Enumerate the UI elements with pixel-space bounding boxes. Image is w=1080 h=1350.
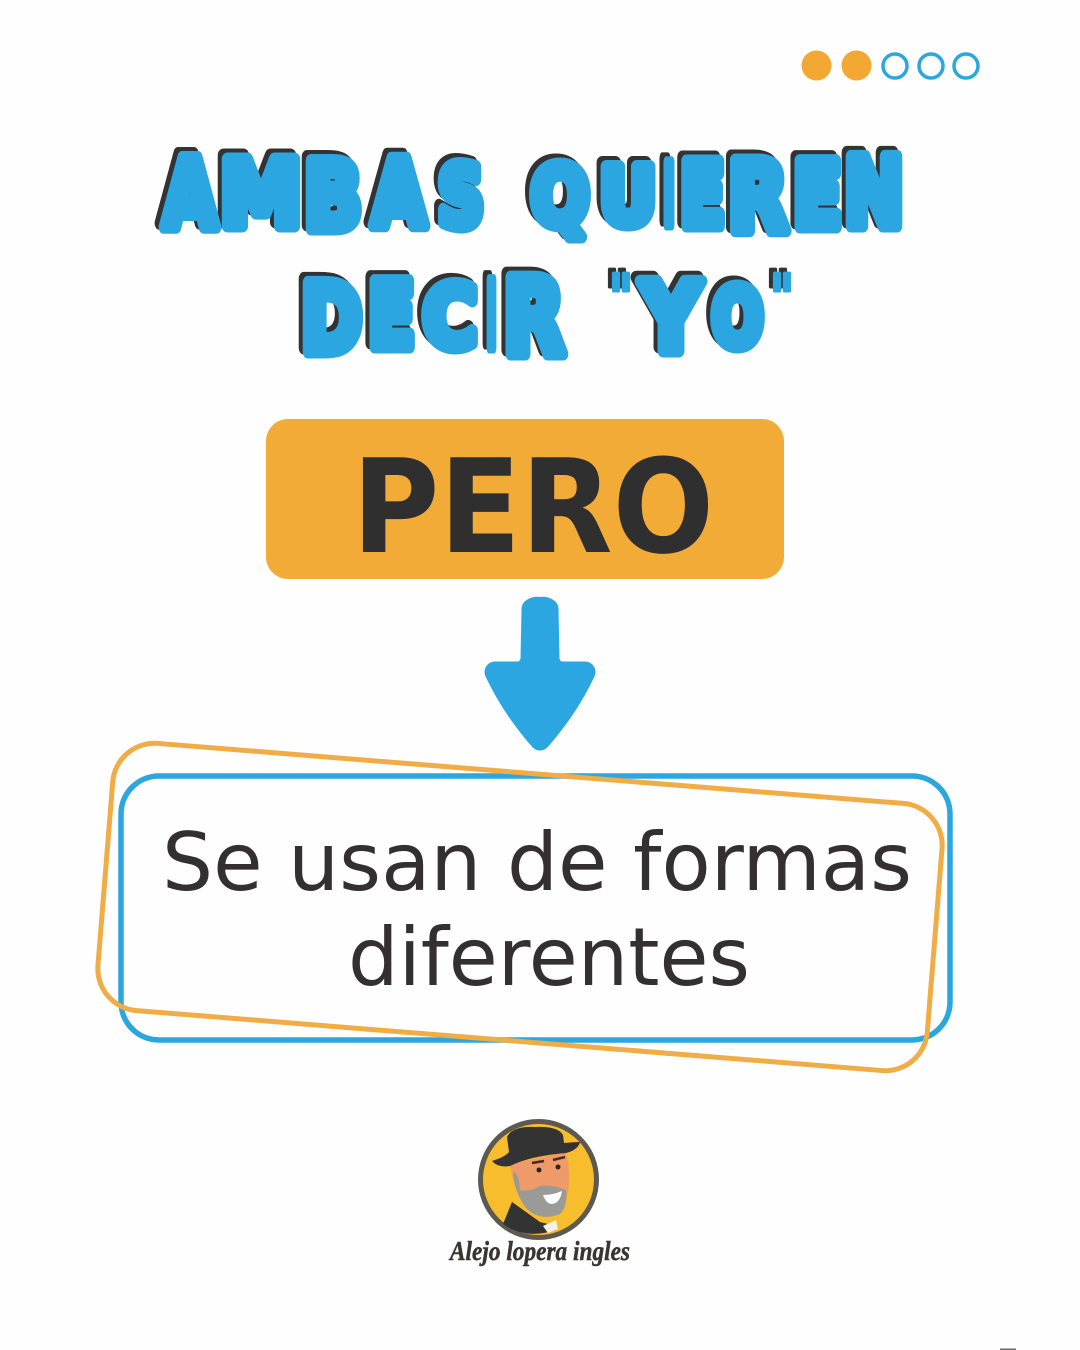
title shadow: I (659, 142, 671, 240)
title shadow: E (364, 260, 411, 365)
logo wordmark: Alejo lopera ingles (448, 1236, 630, 1266)
title shadow: A (159, 136, 213, 246)
orange tilted outline (95, 740, 945, 1074)
title fill: I (663, 146, 675, 244)
title shadow: M (216, 137, 298, 244)
title shadow (159, 135, 900, 375)
title (159, 135, 904, 379)
title shadow: " (605, 257, 629, 330)
title fill: N (844, 139, 904, 249)
title shadow: I (482, 260, 493, 365)
hat (492, 1127, 580, 1166)
title fill: M (220, 141, 302, 248)
title shadow: C (419, 264, 473, 364)
title shadow: E (789, 140, 838, 245)
shirt collar (543, 1220, 558, 1233)
title fill: E (793, 144, 842, 249)
smile (543, 1191, 562, 1204)
title fill: I (486, 264, 497, 369)
title fill: A (372, 140, 426, 248)
face (510, 1152, 569, 1215)
progress dots (802, 50, 978, 80)
beard (513, 1172, 566, 1217)
title fill: Q (531, 150, 589, 245)
title fill: " (770, 261, 794, 334)
body text (162, 816, 912, 1004)
logo (448, 1122, 630, 1266)
blue text box outline (121, 776, 950, 1040)
title fill: A (163, 140, 217, 250)
body text: Se usan de formas (162, 816, 912, 909)
title fill: " (609, 261, 633, 334)
PERO badge: PERO (352, 431, 714, 583)
title shadow: E (676, 139, 721, 243)
jacket (503, 1202, 556, 1234)
title fill: B (304, 143, 362, 252)
title fill: R (728, 141, 788, 254)
title shadow: R (724, 137, 784, 250)
title shadow: N (840, 135, 900, 245)
title shadow: R (499, 253, 561, 375)
title shadow: S (434, 144, 480, 242)
title shadow: O (708, 268, 759, 361)
title shadow: U (596, 149, 652, 239)
title fill: C (423, 268, 477, 368)
title fill: R (503, 257, 565, 379)
title shadow: Q (527, 146, 585, 241)
title fill: D (301, 265, 362, 375)
title fill (163, 139, 904, 379)
brows (532, 1157, 565, 1163)
title fill: U (600, 153, 656, 243)
title fill: E (680, 143, 725, 247)
title fill: S (438, 148, 484, 246)
title shadow: A (368, 136, 422, 244)
corner mark (1000, 1348, 1016, 1350)
title shadow: " (766, 257, 790, 330)
body text: diferentes (348, 911, 750, 1004)
logo badge (480, 1122, 596, 1238)
arrow pointing down (495, 607, 585, 740)
eyes (536, 1168, 542, 1172)
title fill: E (368, 264, 415, 369)
title fill: O (712, 272, 763, 365)
title shadow: Y (636, 260, 698, 370)
title shadow: B (300, 139, 358, 248)
title fill: Y (640, 264, 702, 374)
title shadow: D (297, 261, 358, 371)
